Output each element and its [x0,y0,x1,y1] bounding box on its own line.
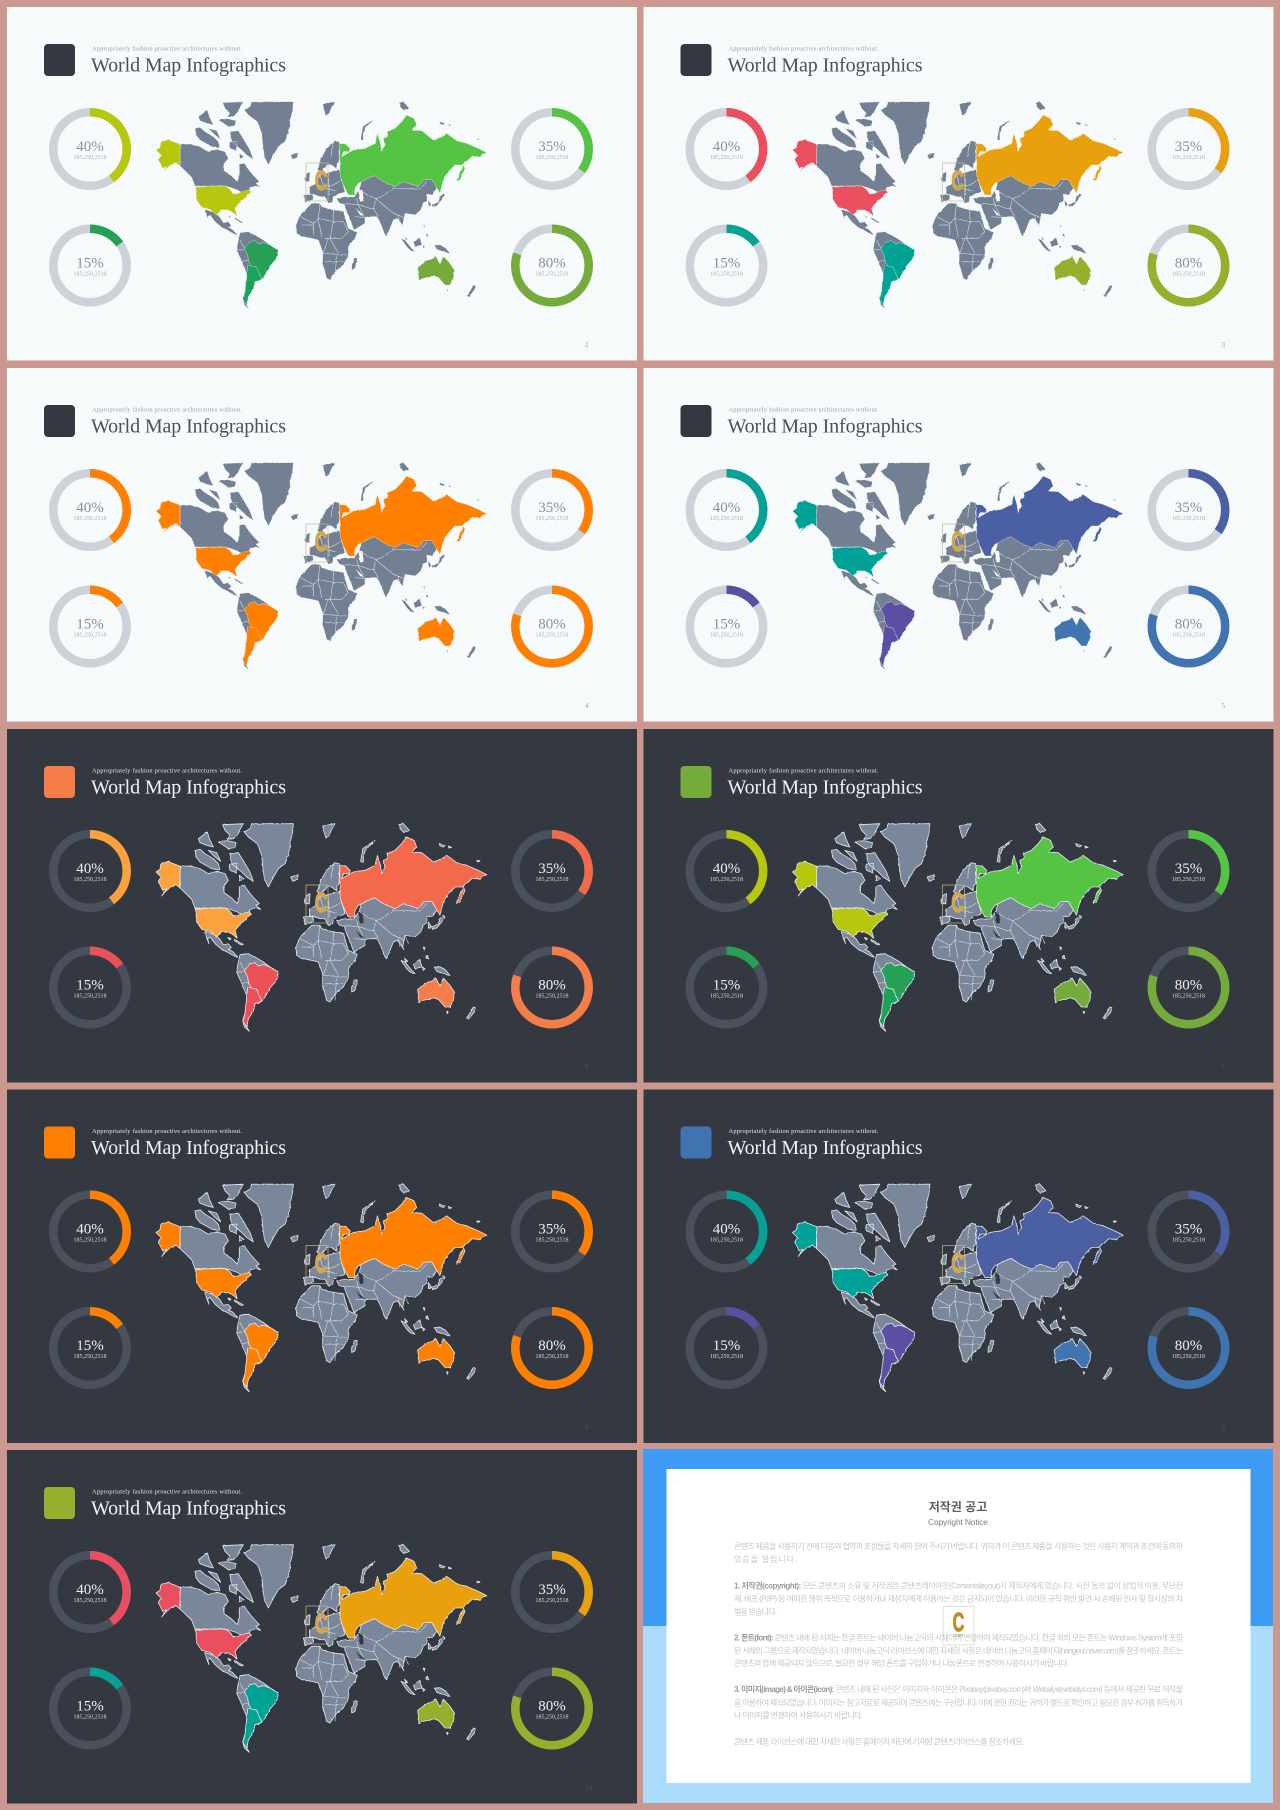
world map [156,463,487,670]
donut 35%: 185,250,2518 [536,1238,568,1244]
donut 80%: 185,250,2518 [536,994,568,1000]
subtitle: Appropriately fashion proactive architectures without. [728,406,879,414]
donut 15%: 185,250,2518 [74,994,106,1000]
icon square [680,44,712,76]
donut 40% [690,473,763,547]
donut 80% [515,229,589,302]
donut 35% [515,834,589,908]
page number: 4 [585,702,589,710]
subtitle: Appropriately fashion proactive architectures without. [92,406,242,414]
donut 40% [53,1195,127,1268]
donut 35%: 35% [538,139,566,155]
donut 15%: 185,250,2518 [710,272,743,278]
donut 15%: 15% [713,978,740,994]
donut 35%: 185,250,2518 [536,877,568,883]
donut 35% [515,1195,589,1268]
donut 15%: 15% [713,256,740,272]
donut 35%: 35% [1175,861,1202,877]
donut 35%: 185,250,2518 [1172,516,1205,522]
copyright subtitle: Copyright Notice [928,1517,988,1527]
donut 15%: 15% [713,1338,740,1354]
copyright body text: 2. 폰트(font): 콘텐츠 내에 된 서체는 한글 폰트는 네이버 나눔고딕의 서체이며 변형하여 제작되었습니다. 한글 외의 모든 폰트는 Windows System에 포함 [734,1632,1184,1642]
donut 40% [690,834,763,908]
copyright body text: 콘텐츠의 함께 제공되지 않으므로, 필요한 경우 해당 폰트를 구입하거나 나눔폰트로 변경하여 사용하시기 바랍니다. [734,1658,1069,1668]
donut 80%: 185,250,2518 [536,1354,568,1360]
panel: copyright notice [643,1449,1273,1803]
icon square [44,405,75,437]
donut 15% [53,1672,127,1745]
watermark [306,163,328,201]
donut 80% [515,951,589,1024]
watermark [306,885,328,923]
donut 80% [515,1672,589,1745]
donut 40% [690,112,763,186]
donut 80% [1152,229,1225,302]
donut 40%: 185,250,2518 [710,877,743,883]
title: World Map Infographics [91,54,286,76]
donut 15%: 15% [76,256,104,272]
donut 35% [1152,834,1225,908]
page number: 3 [1222,341,1226,349]
donut 80%: 185,250,2518 [1172,272,1205,278]
copyright body text: 을 이용하여 제작되었습니다. 이미지는 참고자료로 제공되며 콘텐츠에는 구성합니다. 이에 관한 권리는 귀하가 별도로 확인하고 필요한 경우 허가를 취득하거 [734,1698,1183,1708]
watermark [942,163,964,201]
donut 35% [515,1555,589,1629]
copyright body text: 3. 이미지(image) & 아이콘(icon): 콘텐츠 내에 된 사진은 이미지와 아이콘은 Pixabay(pixabay.com)와 Webalys(webalys.com) 등에서 제공한 무료 저작물 [734,1684,1183,1694]
donut 15%: 15% [76,1338,104,1354]
donut 80% [1152,1311,1225,1385]
donut 15%: 185,250,2518 [74,1714,106,1720]
page number: 7 [1222,1063,1226,1071]
subtitle: Appropriately fashion proactive architectures without. [728,46,879,52]
title: World Map Infographics [728,1137,923,1159]
watermark [306,524,328,562]
watermark [306,1246,328,1284]
donut 15%: 15% [713,616,740,632]
watermark stamp: C [953,1607,965,1637]
donut 40%: 185,250,2518 [710,1238,743,1244]
donut 15% [53,229,127,302]
copyright title: 저작권 공고 [929,1499,987,1514]
icon square [44,766,75,798]
world map [792,824,1123,1031]
donut 15% [53,951,127,1024]
world map [156,1545,487,1752]
copyright body text: 나 이미지를 변경하여 사용하시기 바랍니다. [734,1710,863,1720]
title: World Map Infographics [91,1498,286,1520]
donut 40%: 185,250,2518 [74,155,106,161]
donut 40%: 40% [713,500,740,516]
page number: 5 [1222,702,1226,710]
donut 40%: 185,250,2518 [74,1238,106,1244]
panel: slide 8 dark orange [7,1090,637,1443]
donut 40%: 40% [713,861,740,877]
panel: slide 9 dark blue [644,1090,1274,1443]
donut 40%: 40% [713,139,740,155]
icon square [44,1487,75,1519]
title: World Map Infographics [728,416,923,438]
subtitle: Appropriately fashion proactive architectures without. [728,768,879,774]
donut 80% [1152,590,1225,663]
title: World Map Infographics [728,54,923,76]
donut 80%: 80% [1175,1338,1202,1354]
donut 40% [53,473,127,547]
donut 35%: 35% [1175,1222,1202,1238]
donut 15%: 15% [76,1698,104,1714]
donut 40%: 40% [76,1582,104,1598]
donut 15%: 185,250,2518 [710,1354,743,1360]
donut 15%: 15% [76,616,104,632]
world map [792,463,1123,670]
title: World Map Infographics [728,776,923,798]
subtitle: Appropriately fashion proactive architectures without. [92,1128,242,1135]
title: World Map Infographics [91,416,286,438]
donut 40%: 185,250,2518 [710,155,743,161]
donut 80%: 80% [538,616,566,632]
donut 35%: 35% [1175,500,1202,516]
watermark stamp [943,1606,974,1645]
page number: 6 [585,1063,589,1071]
subtitle: Appropriately fashion proactive architectures without. [728,1128,879,1135]
panel: slide 10 dark multicolor [7,1450,637,1804]
panel: slide 6 dark coral [7,729,637,1082]
donut 80%: 185,250,2518 [536,1714,568,1720]
donut 40%: 185,250,2518 [710,516,743,522]
donut 40% [690,1195,763,1268]
donut 15% [690,1311,763,1385]
donut 80%: 185,250,2518 [1172,1354,1205,1360]
donut 80%: 80% [538,1338,566,1354]
subtitle: Appropriately fashion proactive architectures without. [92,1488,242,1496]
donut 35% [515,112,589,186]
donut 80%: 185,250,2518 [1172,632,1205,638]
donut 35% [1152,112,1225,186]
copyright body text: 콘텐츠 제품 라이선스에 대한 자세한 사항은 홈페이지 하단에 기재된 콘텐츠라이선스를 참조하세요. [734,1736,1024,1746]
donut 35%: 185,250,2518 [536,516,568,522]
donut 35%: 35% [538,500,566,516]
copyright body text: 콘텐츠 제품을 사용하기 전에 다음의 협약과 조항들을 자세히 읽어 주시기 바랍니다. 귀하가 이 콘텐츠 제품을 사용하는 것은 사용자 계약과 조건에 동의하 [734,1541,1184,1551]
donut 40% [53,112,127,186]
panel: slide 3 light multicolor [644,7,1274,360]
donut 35%: 185,250,2518 [1172,1238,1205,1244]
watermark [942,524,964,562]
donut 80% [515,590,589,663]
donut 15%: 185,250,2518 [74,632,106,638]
page number: 9 [1222,1424,1226,1432]
donut 40%: 185,250,2518 [74,516,106,522]
icon square [680,1126,712,1158]
watermark [942,1246,964,1284]
copyright body text: 재, 배포 (P2P) 등 어떠한 행위 목적으로 이용하거나 제삼자에게 이용하는 것은 금지되어 있습니다. 이러한 규칙 위반 발견 시 손해된 민사 및 형사상의 처 [734,1594,1183,1604]
donut 15% [690,229,763,302]
copyright body text [734,1541,1184,1746]
donut 15% [53,590,127,663]
icon square [680,405,712,437]
subtitle: Appropriately fashion proactive architectures without. [92,768,242,774]
page number: 2 [585,341,589,349]
donut 15% [690,590,763,663]
icon square [44,1126,75,1158]
donut 80%: 80% [1175,256,1202,272]
donut 40%: 40% [76,139,104,155]
donut 80%: 185,250,2518 [536,632,568,638]
donut 15% [53,1311,127,1385]
donut 35% [1152,1195,1225,1268]
donut 80%: 185,250,2518 [1172,994,1205,1000]
donut 40% [53,1555,127,1629]
donut 35%: 185,250,2518 [536,155,568,161]
donut 35%: 185,250,2518 [1172,155,1205,161]
donut 80%: 185,250,2518 [536,272,568,278]
donut 40%: 40% [713,1222,740,1238]
donut 35%: 35% [1175,139,1202,155]
donut 40%: 40% [76,1222,104,1238]
donut 35%: 35% [538,1582,566,1598]
subtitle: Appropriately fashion proactive architectures without. [92,46,242,52]
donut 35%: 35% [538,861,566,877]
copyright body text: 된 서체의 그룹으로 제작되었습니다. 네이버 나눔고딕 라이선스에 대한 자세한 사항은 네이버 나눔고딕 홈페이지(hangeul.naver.com)를 참조하세요. 폰트는 [734,1646,1183,1656]
donut 80%: 80% [538,978,566,994]
donut 35%: 35% [538,1222,566,1238]
watermark stamp: COPY [953,1633,964,1638]
donut 40%: 40% [76,861,104,877]
donut 80%: 80% [538,1698,566,1714]
donut 80% [1152,951,1225,1024]
copyright body text: 벌을 받습니다. [734,1606,777,1616]
world map [792,102,1123,309]
donut 15%: 185,250,2518 [74,1354,106,1360]
world map [156,102,487,309]
donut 40%: 40% [76,500,104,516]
watermark [942,885,964,923]
title: World Map Infographics [91,776,286,798]
icon square [680,766,712,798]
world map [156,824,487,1031]
donut 80%: 80% [538,256,566,272]
donut 35%: 185,250,2518 [536,1598,568,1604]
page number: 10 [585,1784,592,1792]
donut 35% [1152,473,1225,547]
donut 15%: 185,250,2518 [710,632,743,638]
icon square [44,44,75,76]
world map [792,1184,1123,1392]
donut 15%: 185,250,2518 [710,994,743,1000]
panel: slide 7 dark green [644,729,1274,1082]
panel: slide 4 light orange [7,368,637,722]
donut 80%: 80% [1175,616,1202,632]
page number: 8 [585,1424,589,1432]
donut 15%: 185,250,2518 [74,272,106,278]
donut 35% [515,473,589,547]
panel: slide 5 light blue [644,368,1274,722]
copyright body text: 1. 저작권(copyright): 모든 콘텐츠의 소유 및 저작권은 콘텐츠레이아웃(Contentslayout)사 제작자에게 있습니다. 사전 동의 없이 상업적 이용, 무단전 [734,1580,1183,1590]
panel: slide 2 light green [7,7,637,360]
donut 40% [53,834,127,908]
watermark [306,1606,328,1644]
world map [156,1184,487,1392]
donut 40%: 185,250,2518 [74,877,106,883]
donut 15%: 15% [76,978,104,994]
donut 80%: 80% [1175,978,1202,994]
donut 40%: 185,250,2518 [74,1598,106,1604]
title: World Map Infographics [91,1137,286,1159]
donut 35%: 185,250,2518 [1172,877,1205,883]
copyright body text: 였음을 알립니다. [734,1554,797,1564]
donut 80% [515,1311,589,1385]
donut 15% [690,951,763,1024]
